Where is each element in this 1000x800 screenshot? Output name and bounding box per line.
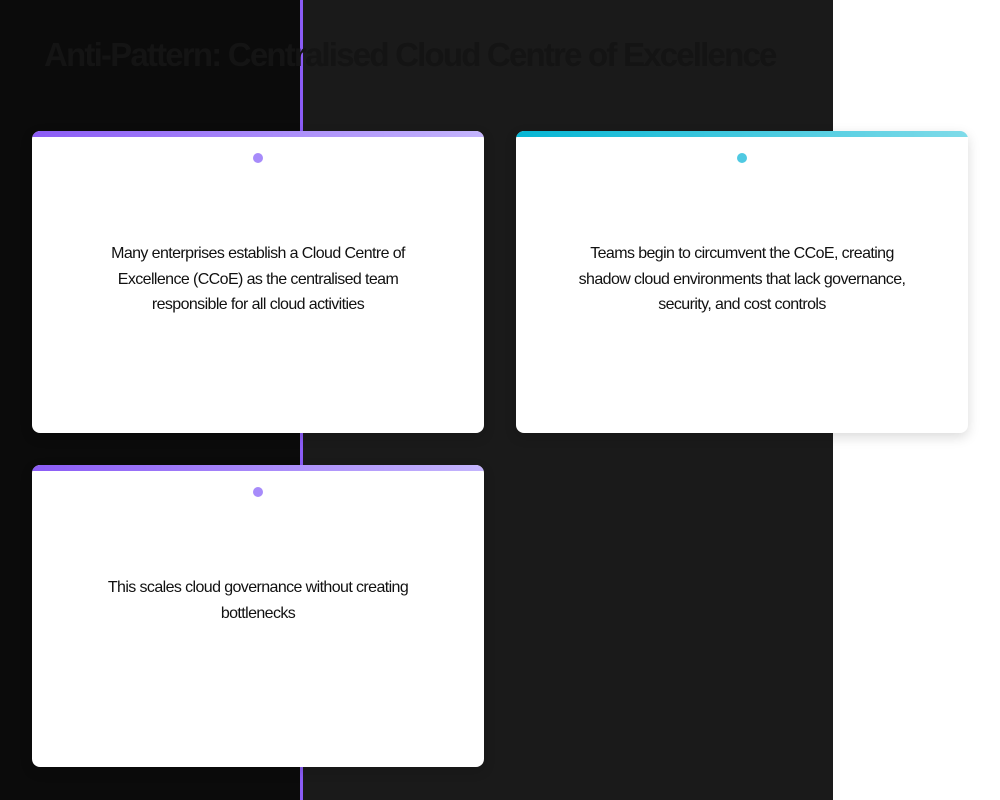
card 3	[32, 465, 484, 767]
text: Teams begin to circumvent the CCoE, creating shadow cloud environments that lack governance, security, and cost controls	[579, 245, 905, 313]
card 2	[516, 131, 968, 433]
dot	[253, 153, 263, 163]
text: This scales cloud governance without creating bottlenecks	[108, 579, 408, 622]
text: Many enterprises establish a Cloud Centre of Excellence (CCoE) as the centralised team responsible for all cloud activities	[111, 245, 405, 313]
dot	[253, 487, 263, 497]
card 1	[32, 131, 484, 433]
title: Anti-Pattern: Centralised Cloud Centre of Excellence	[44, 36, 776, 73]
timeline line	[300, 0, 303, 800]
dot	[737, 153, 747, 163]
